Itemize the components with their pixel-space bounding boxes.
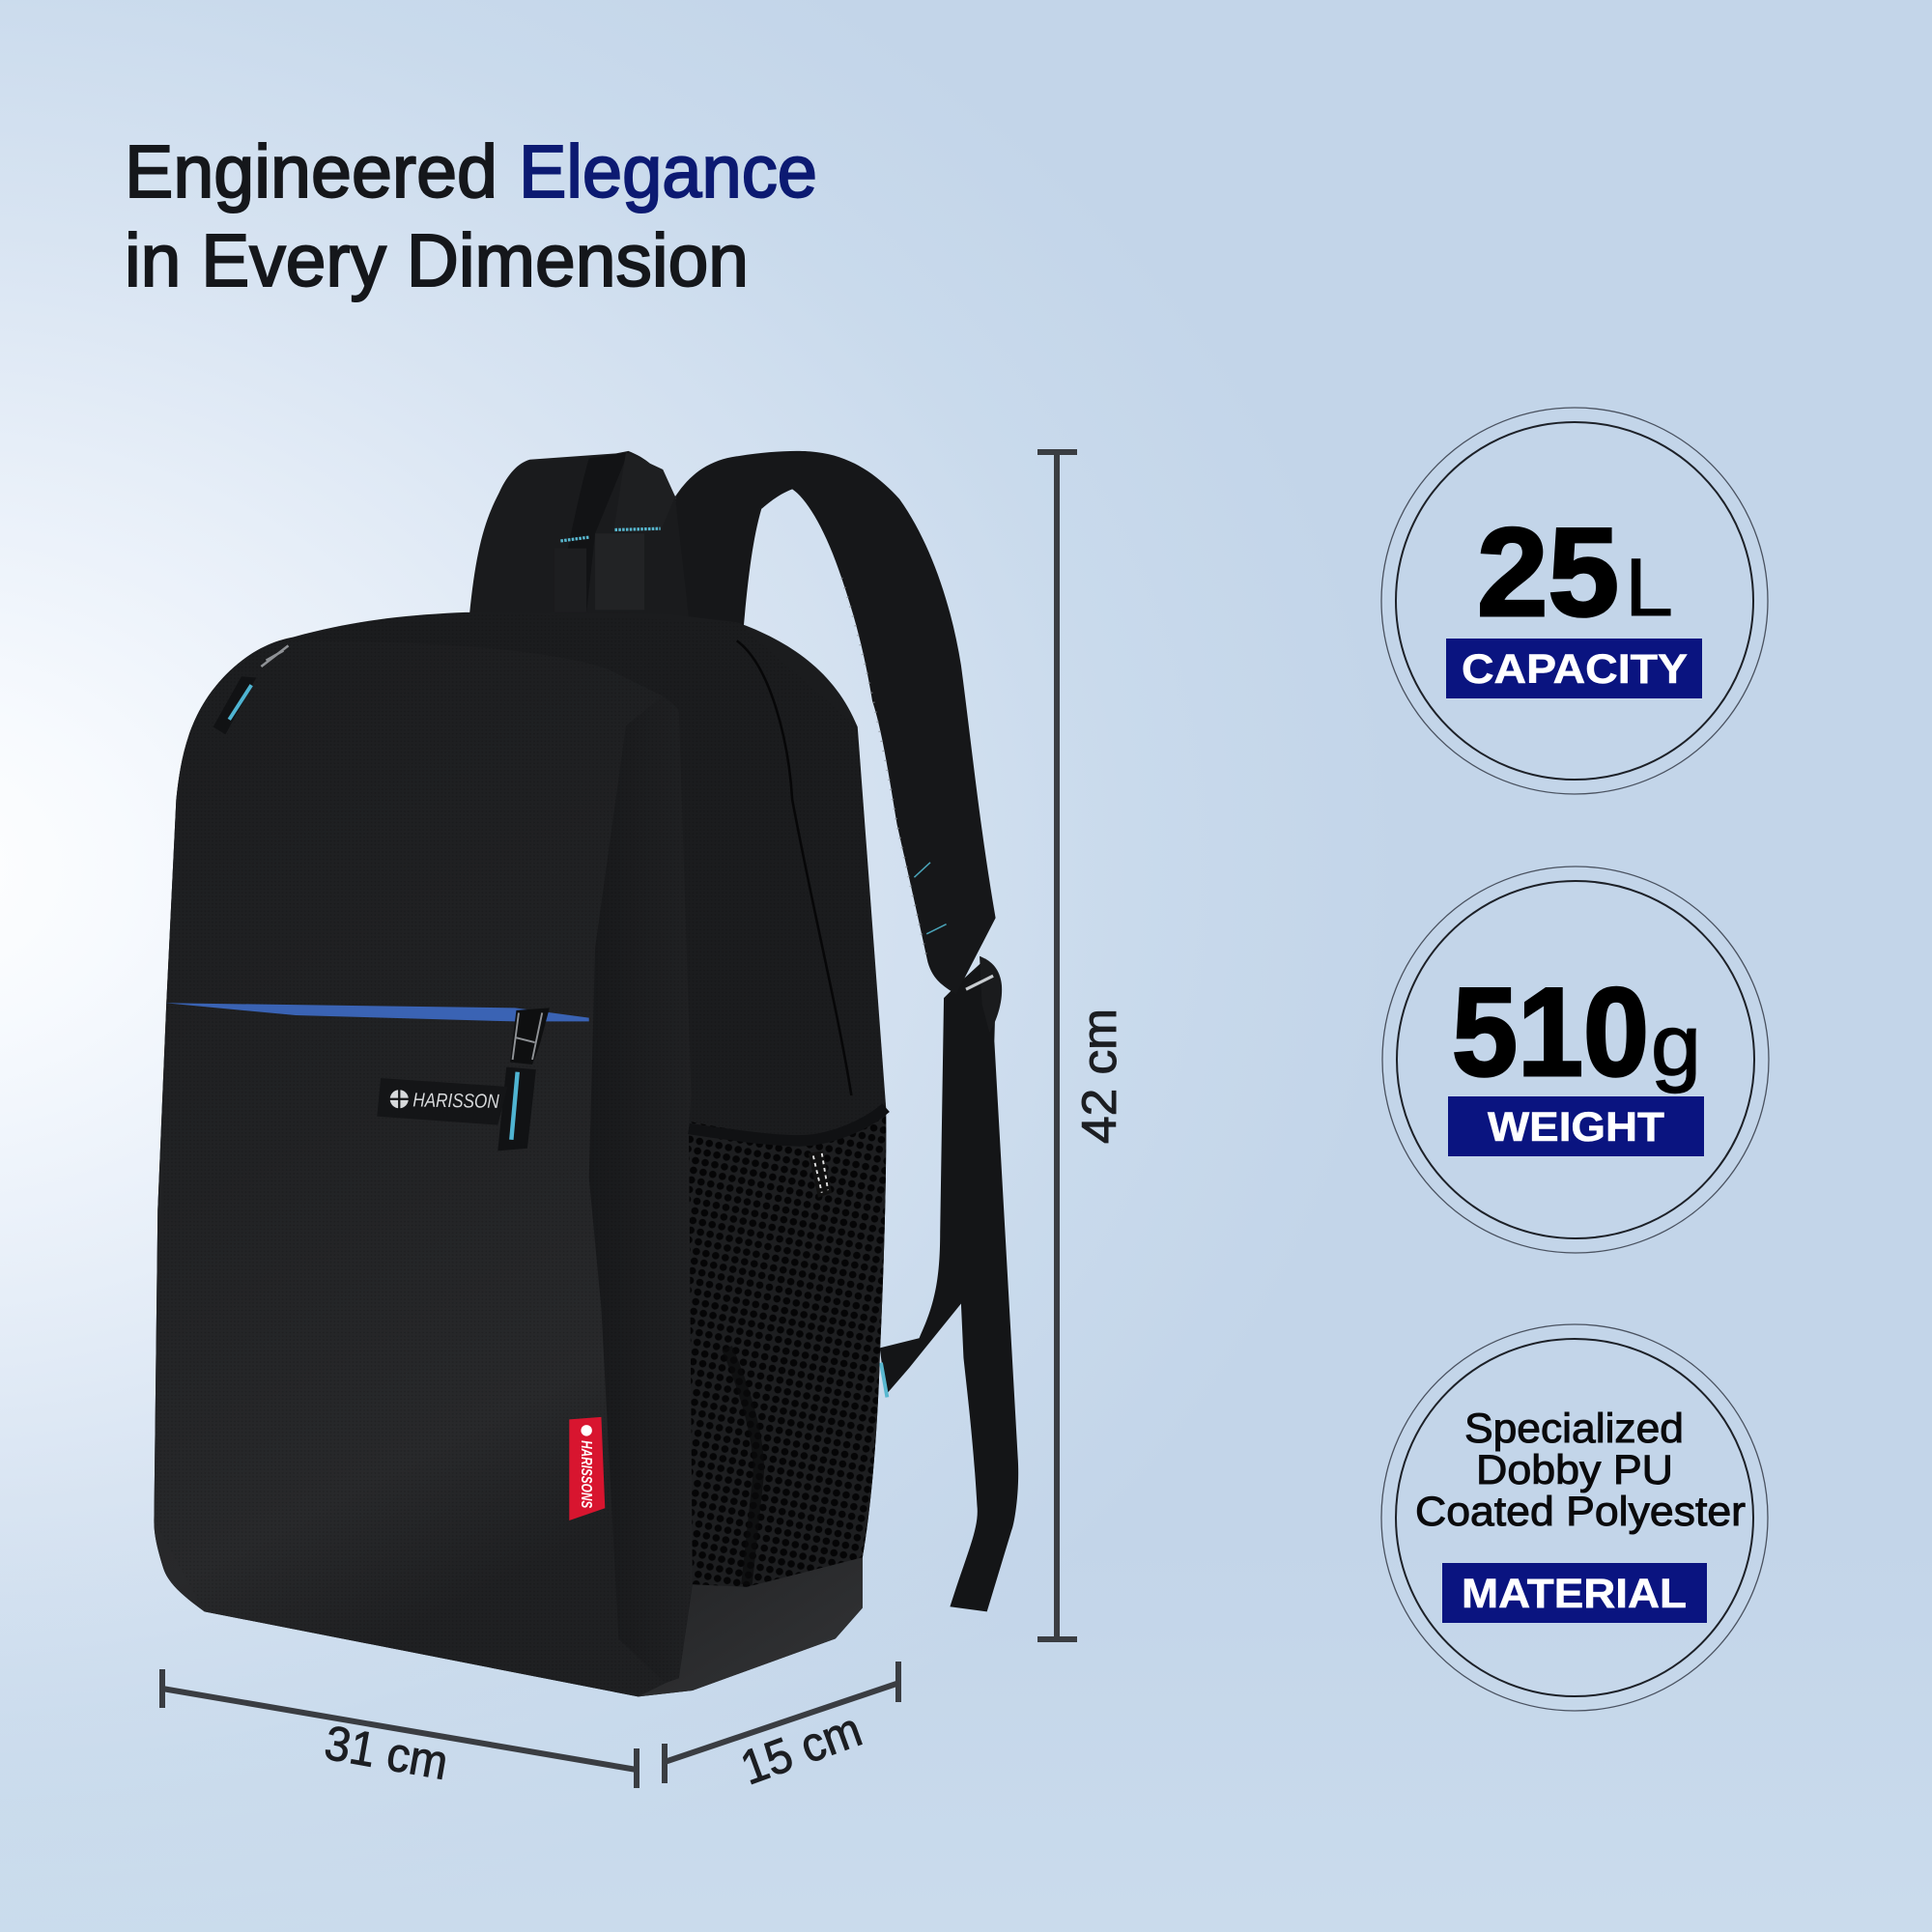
height label: 42 cm bbox=[1072, 1009, 1126, 1144]
depth label: 15 cm bbox=[734, 1702, 868, 1795]
material badge bbox=[1381, 1324, 1768, 1711]
title: Engineered bbox=[125, 130, 497, 213]
weight unit: g bbox=[1651, 998, 1701, 1094]
red brand tag bbox=[569, 1417, 605, 1520]
far shoulder strap and top handle bbox=[469, 451, 696, 622]
front panel bbox=[154, 640, 666, 1696]
depth dimension line bbox=[665, 1662, 899, 1783]
material label bbox=[1442, 1563, 1707, 1623]
material label: MATERIAL bbox=[1462, 1571, 1687, 1617]
material description: Specialized bbox=[1464, 1406, 1684, 1452]
weight label bbox=[1448, 1096, 1704, 1156]
bag main body bbox=[154, 612, 886, 1696]
material description: Coated Polyester bbox=[1415, 1489, 1746, 1535]
fabric weave texture bbox=[154, 612, 886, 1696]
side gusset bbox=[589, 696, 693, 1683]
brand patch: HARISSON bbox=[412, 1090, 499, 1113]
width dimension line bbox=[162, 1669, 637, 1788]
weight label: WEIGHT bbox=[1488, 1104, 1664, 1151]
title: Elegance bbox=[519, 130, 817, 213]
lower strap webbing bbox=[880, 956, 1018, 1611]
front zip pull bbox=[497, 1008, 550, 1151]
material description: Dobby PU bbox=[1476, 1447, 1673, 1493]
material description bbox=[1415, 1406, 1746, 1535]
red brand tag: HARISSONS bbox=[578, 1440, 594, 1508]
front pocket blue zip bbox=[165, 1003, 589, 1021]
weight badge bbox=[1382, 867, 1769, 1253]
capacity label: CAPACITY bbox=[1462, 646, 1688, 693]
brand patch bbox=[377, 1078, 508, 1125]
near shoulder strap bbox=[675, 451, 996, 994]
capacity badge bbox=[1381, 408, 1768, 794]
height dimension line bbox=[1037, 452, 1077, 1639]
capacity value: 25 bbox=[1477, 501, 1619, 642]
back panel seams bbox=[737, 640, 851, 1095]
title bbox=[125, 130, 817, 302]
capacity label bbox=[1446, 639, 1702, 698]
title: in Every Dimension bbox=[125, 219, 749, 302]
width label: 31 cm bbox=[321, 1716, 452, 1790]
top zip pull bbox=[213, 645, 288, 734]
bag base bbox=[639, 1557, 863, 1696]
capacity unit: L bbox=[1625, 542, 1673, 633]
mesh side pocket bbox=[689, 1106, 886, 1587]
weight value: 510 bbox=[1452, 961, 1649, 1102]
backpack illustration bbox=[154, 451, 1018, 1696]
